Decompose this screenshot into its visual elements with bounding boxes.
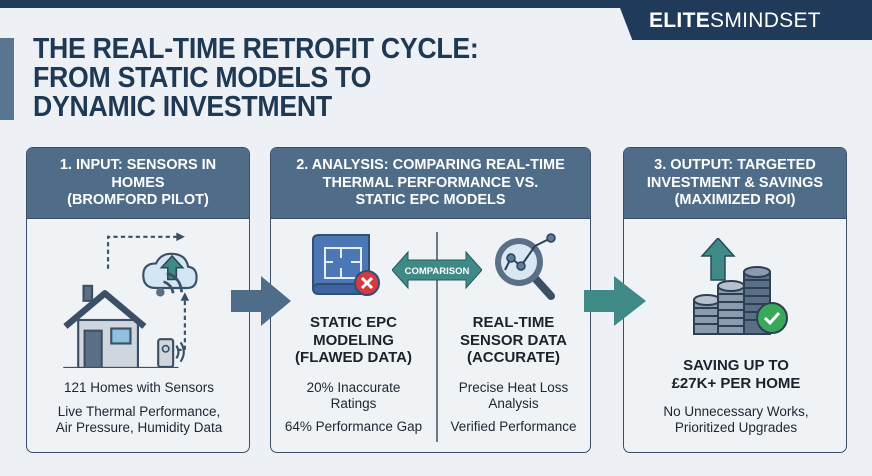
left accent bar xyxy=(0,38,14,120)
header 1: 1. INPUT: SENSORS IN xyxy=(60,157,216,173)
text: real-time stats: Precise Heat Loss xyxy=(459,380,568,395)
icon: blueprint xyxy=(312,234,380,296)
arrow 2 xyxy=(584,276,646,326)
title: FROM STATIC MODELS TO xyxy=(33,62,371,94)
comparison arrow: COMPARISON xyxy=(405,266,470,277)
header 3 xyxy=(624,148,846,219)
title xyxy=(33,33,479,123)
header 3: 3. OUTPUT: TARGETED xyxy=(654,157,816,173)
panel: input xyxy=(26,147,250,453)
text: real-time: REAL-TIME xyxy=(473,314,554,331)
panel: analysis: 64% Performance Gap xyxy=(285,419,422,434)
icon: coins xyxy=(693,238,788,335)
logo xyxy=(620,8,872,40)
title: THE REAL-TIME RETROFIT CYCLE: xyxy=(33,33,479,65)
text: outcome: No Unnecessary Works, xyxy=(663,404,809,419)
text: live data xyxy=(56,404,222,435)
text: real-time xyxy=(460,314,567,366)
panel: analysis: Verified Performance xyxy=(450,419,577,434)
header 2: THERMAL PERFORMANCE VS. xyxy=(323,174,538,190)
text: static EPC: STATIC EPC xyxy=(310,314,397,331)
icon: magnifier xyxy=(495,233,556,300)
text: saving: SAVING UP TO xyxy=(683,357,789,374)
text: saving: £27K+ PER HOME xyxy=(672,374,800,392)
divider xyxy=(436,232,438,442)
text: static EPC xyxy=(295,314,412,366)
header 1: HOMES xyxy=(111,174,165,190)
panel: analysis xyxy=(270,147,591,453)
comparison arrow xyxy=(392,250,482,290)
header 1 xyxy=(27,148,249,219)
text: live data: Air Pressure, Humidity Data xyxy=(56,420,222,435)
header 3: (MAXIMIZED ROI) xyxy=(675,192,795,208)
header 3: INVESTMENT & SAVINGS xyxy=(647,174,823,190)
text: 121 homes: 121 Homes with Sensors xyxy=(64,380,214,395)
top bar xyxy=(0,0,872,8)
header 1: (BROMFORD PILOT) xyxy=(67,192,209,208)
text: real-time: (ACCURATE) xyxy=(467,349,560,366)
header 2: STATIC EPC MODELS xyxy=(355,192,506,208)
text: real-time stats xyxy=(459,380,568,411)
header 2: 2. ANALYSIS: COMPARING REAL-TIME xyxy=(296,157,565,173)
icon: house with sensors and cloud xyxy=(63,232,198,368)
text: static EPC: MODELING xyxy=(313,332,394,348)
text: real-time: SENSOR DATA xyxy=(460,332,567,348)
text: static stats: Ratings xyxy=(331,396,376,411)
text: outcome: Prioritized Upgrades xyxy=(675,420,797,435)
title: DYNAMIC INVESTMENT xyxy=(33,91,332,123)
text: static stats: 20% Inaccurate xyxy=(307,380,400,395)
text: static EPC: (FLAWED DATA) xyxy=(295,349,412,366)
header 2 xyxy=(271,148,590,219)
panel: output xyxy=(623,147,847,453)
text: static stats xyxy=(307,380,400,411)
text: outcome xyxy=(663,404,809,435)
text: live data: Live Thermal Performance, xyxy=(58,404,220,419)
text: real-time stats: Analysis xyxy=(488,396,539,411)
arrow 1 xyxy=(231,276,291,326)
text: saving xyxy=(672,357,800,392)
logo: ELITESMINDSET xyxy=(649,9,821,32)
